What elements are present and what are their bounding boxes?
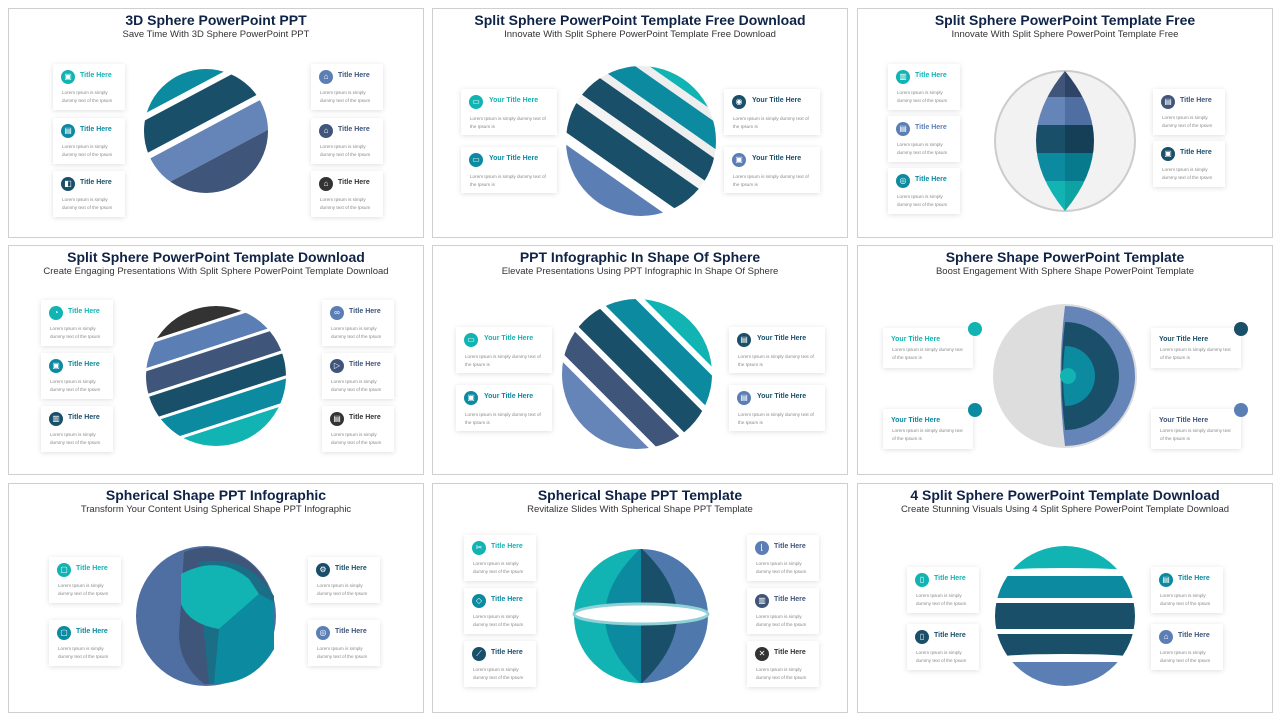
card L2: dummy text of the Ipsum <box>62 152 112 157</box>
card R3 <box>322 406 394 452</box>
card L1: dummy text of the Ipsum <box>58 591 108 596</box>
card L1: dummy text of the Ipsum <box>62 98 112 103</box>
card R1 <box>322 300 394 346</box>
card L2: ▣ <box>467 393 475 402</box>
sphere 6 <box>993 304 1137 448</box>
card L1: Lorem Ipsum is simply <box>62 90 108 95</box>
card L2: Lorem Ipsum is simply <box>916 650 962 655</box>
card L3: ◧ <box>64 179 72 188</box>
card R3: Title Here <box>774 649 806 656</box>
panel: 3D Sphere PowerPoint PPT <box>8 8 424 238</box>
card L2 <box>49 620 121 666</box>
card L1: Title Here <box>491 543 523 550</box>
card L1: ▢ <box>60 565 68 574</box>
card L2: dummy text of the Ipsum <box>916 658 966 663</box>
card R2: Lorem Ipsum is simply dummy text of <box>738 412 814 417</box>
card L1: Your Title Here <box>891 336 940 343</box>
card R1: Your Title Here <box>752 97 801 104</box>
card L1: Title Here <box>76 565 108 572</box>
card R1 <box>311 64 383 110</box>
card L1 <box>883 328 973 368</box>
card L1: Lorem Ipsum is simply dummy text of <box>465 354 541 359</box>
sphere 8 <box>572 549 710 683</box>
card R2 <box>322 353 394 399</box>
card L2: Lorem Ipsum is simply <box>897 142 943 147</box>
card R1: Lorem Ipsum is simply <box>331 326 377 331</box>
card R3: Lorem Ipsum is simply <box>331 432 377 437</box>
card L2: Lorem Ipsum is simply <box>62 144 108 149</box>
card L1: the Ipsum is <box>465 362 490 367</box>
card L2 <box>883 409 973 449</box>
card L2: Your Title Here <box>484 393 533 400</box>
sphere 3 <box>995 69 1135 213</box>
card L3: ◎ <box>900 176 906 185</box>
card L3: ▥ <box>52 414 60 423</box>
card R2 <box>308 620 380 666</box>
card R2: dummy text of the Ipsum <box>1160 658 1210 663</box>
subtitle: Innovate With Split Sphere PowerPoint Template Free Download <box>504 29 776 40</box>
card R2: Lorem Ipsum is simply <box>756 614 802 619</box>
panel: Split Sphere Template Download <box>8 245 424 475</box>
card L1 <box>461 89 557 135</box>
title: Spherical Shape PPT Infographic <box>106 487 326 503</box>
card R1 <box>729 327 825 373</box>
card R2: ⌂ <box>324 126 328 135</box>
subtitle: Transform Your Content Using Spherical Shape PPT Infographic <box>81 504 351 515</box>
card L1 <box>888 64 960 110</box>
card R2: Lorem Ipsum is simply dummy text of <box>733 174 809 179</box>
card L2: ▭ <box>472 155 480 164</box>
card R2: the Ipsum is <box>733 182 758 187</box>
card L1: Your Title Here <box>489 97 538 104</box>
card R1: ∞ <box>334 308 340 317</box>
card L1 <box>907 567 979 613</box>
card R1 <box>724 89 820 135</box>
card R3: ⌂ <box>324 179 328 188</box>
panel: Spherical Shape PPT Infographic <box>8 483 424 713</box>
title: 4 Split Sphere PowerPoint Template Download <box>910 487 1220 503</box>
card L3 <box>41 406 113 452</box>
card L3: Title Here <box>68 414 100 421</box>
card L2: Title Here <box>68 361 100 368</box>
card L2: Lorem Ipsum is simply dummy text <box>892 428 963 433</box>
card L1: of the Ipsum is <box>892 355 922 360</box>
card L2: Lorem Ipsum is simply <box>473 614 519 619</box>
card R1 <box>308 557 380 603</box>
card L3: dummy text of the Ipsum <box>473 675 523 680</box>
card L1: Title Here <box>934 575 966 582</box>
card L2: Lorem Ipsum is simply dummy text of <box>470 174 546 179</box>
card L1: dummy text of the Ipsum <box>473 569 523 574</box>
card R2 <box>1151 409 1241 449</box>
card R3: dummy text of the Ipsum <box>756 675 806 680</box>
card L1: Lorem Ipsum is simply <box>50 326 96 331</box>
card R2: of the Ipsum is <box>1160 436 1190 441</box>
card R1 <box>1151 567 1223 613</box>
card L1 <box>49 557 121 603</box>
card R3: Lorem Ipsum is simply <box>320 197 366 202</box>
card R2: Lorem Ipsum is simply <box>331 379 377 384</box>
card L1: ✂ <box>476 543 482 552</box>
card L1: Lorem Ipsum is simply dummy text of <box>470 116 546 121</box>
card L3 <box>53 171 125 217</box>
card R1 <box>1151 328 1241 368</box>
card R1: Title Here <box>338 72 370 79</box>
card L2 <box>461 147 557 193</box>
panel: PPT Infographic In Shape Of Sphere <box>432 245 848 475</box>
card L2: Your Title Here <box>489 155 538 162</box>
card L3: dummy text of the Ipsum <box>50 440 100 445</box>
card R2: the Ipsum is <box>738 420 763 425</box>
card R2 <box>729 385 825 431</box>
card R1 <box>747 535 819 581</box>
card R2: Title Here <box>774 596 806 603</box>
card L1: ▭ <box>467 335 475 344</box>
card L2: Lorem Ipsum is simply <box>50 379 96 384</box>
icon L2 <box>968 403 982 417</box>
card L1 <box>456 327 552 373</box>
card L1: Lorem Ipsum is simply <box>897 90 943 95</box>
card L1: ◔ <box>54 308 58 317</box>
card R2: Lorem Ipsum is simply dummy text <box>1160 428 1231 433</box>
card R1: ◉ <box>736 97 742 106</box>
card L3 <box>464 641 536 687</box>
card L2 <box>41 353 113 399</box>
card L1: Your Title Here <box>484 335 533 342</box>
card R3: dummy text of the Ipsum <box>320 205 370 210</box>
card R1: Lorem Ipsum is simply <box>1160 593 1206 598</box>
card R1: Your Title Here <box>1159 336 1208 343</box>
subtitle: Save Time With 3D Sphere PowerPoint PPT <box>123 29 309 40</box>
card L2: Title Here <box>80 126 112 133</box>
card L1: Title Here <box>80 72 112 79</box>
sphere 7 <box>136 546 276 686</box>
card R2: Lorem Ipsum is simply <box>317 646 363 651</box>
subtitle: Elevate Presentations Using PPT Infographic In Shape Of Sphere <box>502 266 778 277</box>
icon R1 <box>1234 322 1248 336</box>
title: 3D Sphere PowerPoint PPT <box>125 12 307 28</box>
card R1: Lorem Ipsum is simply <box>1162 115 1208 120</box>
sphere 5 <box>562 299 712 449</box>
subtitle: Boost Engagement With Sphere Shape PowerPoint Template <box>936 266 1194 277</box>
card L2: Lorem Ipsum is simply dummy text of <box>465 412 541 417</box>
title: Split Sphere PowerPoint Template Free <box>935 12 1195 28</box>
card R2: Title Here <box>338 126 370 133</box>
card R2: ◎ <box>320 628 326 637</box>
card L3: Title Here <box>915 176 947 183</box>
card L2: ◇ <box>476 596 482 605</box>
card R1: dummy text of the Ipsum <box>331 334 381 339</box>
card L1: ▭ <box>472 97 480 106</box>
sphere 1 <box>144 69 268 193</box>
card R3: Lorem Ipsum is simply <box>756 667 802 672</box>
card R2: Title Here <box>1178 632 1210 639</box>
card R2: Lorem Ipsum is simply <box>1162 167 1208 172</box>
card R2: Your Title Here <box>1159 417 1208 424</box>
card R3 <box>747 641 819 687</box>
card L3: Title Here <box>491 649 523 656</box>
card L1: ▯ <box>920 575 924 584</box>
panel: Sphere Shape PowerPoint Template <box>857 245 1273 475</box>
card R1: dummy text of the Ipsum <box>317 591 367 596</box>
card R1: Title Here <box>1178 575 1210 582</box>
card R3: dummy text of the Ipsum <box>331 440 381 445</box>
card L2: dummy text of the Ipsum <box>58 654 108 659</box>
card R2: Your Title Here <box>757 393 806 400</box>
panel: Split Sphere Free Download <box>432 8 848 238</box>
subtitle: Create Engaging Presentations With Split Sphere PowerPoint Template Download <box>43 266 389 277</box>
card R3 <box>311 171 383 217</box>
card L2: ▣ <box>52 361 60 370</box>
card R1: Lorem Ipsum is simply dummy text of <box>733 116 809 121</box>
card L2 <box>907 624 979 670</box>
card R2: dummy text of the Ipsum <box>320 152 370 157</box>
card L1: ▣ <box>64 72 72 81</box>
card R1: Title Here <box>349 308 381 315</box>
card L1 <box>53 64 125 110</box>
card R1: Title Here <box>1180 97 1212 104</box>
card L2: the Ipsum is <box>465 420 490 425</box>
subtitle: Revitalize Slides With Spherical Shape PPT Template <box>527 504 753 515</box>
card L1: Lorem Ipsum is simply <box>473 561 519 566</box>
card L2: ▢ <box>60 628 68 637</box>
card R1: Title Here <box>335 565 367 572</box>
card R1: dummy text of the Ipsum <box>320 98 370 103</box>
card R1: Title Here <box>774 543 806 550</box>
title: PPT Infographic In Shape Of Sphere <box>520 249 760 265</box>
card L2 <box>888 116 960 162</box>
card R2: ⌂ <box>1164 632 1168 641</box>
card R2: dummy text of the Ipsum <box>331 387 381 392</box>
card L3: dummy text of the Ipsum <box>62 205 112 210</box>
card R1: Lorem Ipsum is simply <box>317 583 363 588</box>
card R1 <box>1153 89 1225 135</box>
card R1: dummy text of the Ipsum <box>1162 123 1212 128</box>
card R2: dummy text of the Ipsum <box>1162 175 1212 180</box>
card L3: Lorem Ipsum is simply <box>62 197 108 202</box>
card L3: Title Here <box>80 179 112 186</box>
card L2: Lorem Ipsum is simply <box>58 646 104 651</box>
card R1: ▤ <box>740 335 748 344</box>
card L2: the Ipsum is <box>470 182 495 187</box>
card R1: ▤ <box>1162 575 1170 584</box>
panel: Split Sphere Template Free <box>857 8 1273 238</box>
card L2: ▤ <box>64 126 72 135</box>
card R1: Lorem Ipsum is simply dummy text <box>1160 347 1231 352</box>
card L3: Lorem Ipsum is simply <box>50 432 96 437</box>
card R2 <box>1151 624 1223 670</box>
card R2 <box>311 118 383 164</box>
subtitle: Innovate With Split Sphere PowerPoint Template Free <box>952 29 1178 40</box>
card R1: dummy text of the Ipsum <box>1160 601 1210 606</box>
card L2: Title Here <box>76 628 108 635</box>
card R2: Your Title Here <box>752 155 801 162</box>
card L1: dummy text of the Ipsum <box>897 98 947 103</box>
card L1: Lorem Ipsum is simply dummy text <box>892 347 963 352</box>
card L1: dummy text of the Ipsum <box>916 601 966 606</box>
card R2: ▷ <box>334 361 340 370</box>
card L2 <box>456 385 552 431</box>
card L2 <box>53 118 125 164</box>
card L2: Title Here <box>915 124 947 131</box>
card L1: ▥ <box>899 72 907 81</box>
card R1: Your Title Here <box>757 335 806 342</box>
card R2 <box>724 147 820 193</box>
card R2: Title Here <box>1180 149 1212 156</box>
card R1: ⌊ <box>760 543 764 552</box>
card R1: Lorem Ipsum is simply <box>320 90 366 95</box>
card R3: Title Here <box>349 414 381 421</box>
card L2: dummy text of the Ipsum <box>473 622 523 627</box>
card L2: Title Here <box>934 632 966 639</box>
card L3: ⟋ <box>476 649 482 658</box>
card R2: Lorem Ipsum is simply <box>1160 650 1206 655</box>
card L3: Lorem Ipsum is simply <box>473 667 519 672</box>
card L2: ▯ <box>920 632 924 641</box>
panel: Spherical Shape PPT Template <box>432 483 848 713</box>
card R1: the Ipsum is <box>733 124 758 129</box>
sphere 4 <box>146 306 286 446</box>
card R1: ⌂ <box>324 72 328 81</box>
title: Spherical Shape PPT Template <box>538 487 742 503</box>
card L1: Lorem Ipsum is simply <box>916 593 962 598</box>
card L3: dummy text of the Ipsum <box>897 202 947 207</box>
card L1: dummy text of the Ipsum <box>50 334 100 339</box>
card R3: ▤ <box>333 414 341 423</box>
card R2: ▣ <box>1164 149 1172 158</box>
icon R2 <box>1234 403 1248 417</box>
card L2: ▤ <box>899 124 907 133</box>
card L1: Title Here <box>68 308 100 315</box>
card R1: ⚙ <box>319 565 327 574</box>
title: Split Sphere PowerPoint Template Free Download <box>474 12 806 28</box>
title: Split Sphere PowerPoint Template Download <box>67 249 365 265</box>
card R2: Title Here <box>335 628 367 635</box>
card L1 <box>41 300 113 346</box>
card L3 <box>888 168 960 214</box>
card L2: of the Ipsum is <box>892 436 922 441</box>
card R1: dummy text of the Ipsum <box>756 569 806 574</box>
card R1: ▤ <box>1164 97 1172 106</box>
card L1: Lorem Ipsum is simply <box>58 583 104 588</box>
card R2: ▤ <box>740 393 748 402</box>
card R1: the Ipsum is <box>738 362 763 367</box>
card L3: Lorem Ipsum is simply <box>897 194 943 199</box>
card R2: dummy text of the Ipsum <box>756 622 806 627</box>
card R3: Title Here <box>338 179 370 186</box>
icon L1 <box>968 322 982 336</box>
subtitle: Create Stunning Visuals Using 4 Split Sphere PowerPoint Template Download <box>901 504 1229 515</box>
card L1 <box>464 535 536 581</box>
card R1: of the Ipsum is <box>1160 355 1190 360</box>
card R1: Lorem Ipsum is simply dummy text of <box>738 354 814 359</box>
card R2: Title Here <box>349 361 381 368</box>
card L1: Title Here <box>915 72 947 79</box>
card R2: ▥ <box>758 596 766 605</box>
card R1: Lorem Ipsum is simply <box>756 561 802 566</box>
card L2: dummy text of the Ipsum <box>897 150 947 155</box>
sphere 9 <box>995 546 1135 686</box>
card R3: ✕ <box>759 649 765 658</box>
card R2: ▣ <box>735 155 743 164</box>
card L2: Title Here <box>491 596 523 603</box>
sphere 2 <box>566 66 716 216</box>
title: Sphere Shape PowerPoint Template <box>946 249 1184 265</box>
card L2: Your Title Here <box>891 417 940 424</box>
card L2 <box>464 588 536 634</box>
card R2 <box>1153 141 1225 187</box>
card R2: Lorem Ipsum is simply <box>320 144 366 149</box>
panel: 4 Split Sphere Template Download <box>857 483 1273 713</box>
card R2: dummy text of the Ipsum <box>317 654 367 659</box>
card L1: the Ipsum is <box>470 124 495 129</box>
card L2: dummy text of the Ipsum <box>50 387 100 392</box>
card R2 <box>747 588 819 634</box>
